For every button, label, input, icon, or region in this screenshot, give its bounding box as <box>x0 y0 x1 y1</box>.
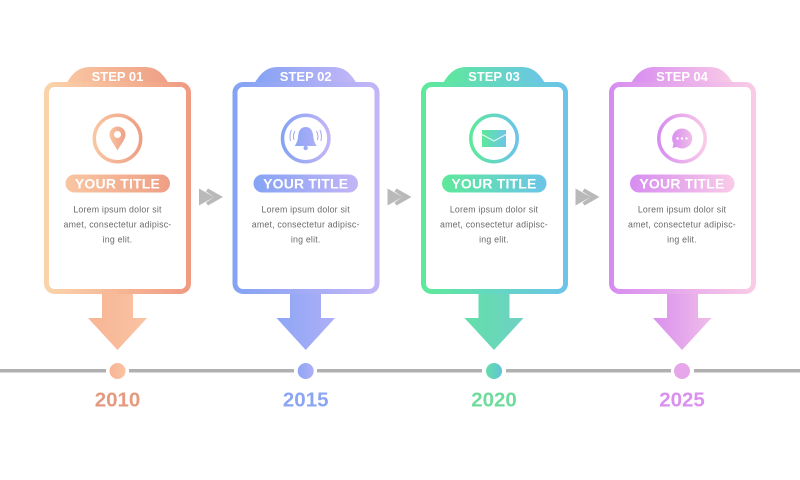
step 03 body text <box>440 204 548 244</box>
step 04 circle icon: chat bubble <box>659 115 705 162</box>
step 02 column <box>235 67 377 412</box>
step 04 timeline dot <box>674 363 690 379</box>
step 03 title pill: YOUR TITLE <box>451 176 537 192</box>
step 03 column <box>424 67 566 412</box>
step 01 arrow <box>88 292 147 350</box>
step 03 body text: ing elit. <box>479 234 509 244</box>
step 02 year: 2015 <box>283 388 329 412</box>
step 01 circle icon: location pin <box>94 115 141 162</box>
step 01 year: 2010 <box>95 388 140 412</box>
step 02 tab <box>254 67 357 84</box>
arrow: step 01 to 02 <box>199 188 223 206</box>
step 04 title pill: YOUR TITLE <box>639 176 725 192</box>
step 02 tab: STEP 02 <box>280 69 332 84</box>
step 01 timeline dot <box>110 363 126 379</box>
step 04 card <box>612 84 754 292</box>
step 04 year: 2025 <box>659 388 705 412</box>
step 01 body text: Lorem ipsum dolor sit <box>73 204 162 214</box>
step 02 title pill: YOUR TITLE <box>263 176 348 192</box>
step 02 timeline dot <box>298 363 314 379</box>
step 02 card <box>235 84 377 292</box>
step 02 circle icon: bell <box>282 115 329 162</box>
step 04 body text: ing elit. <box>667 234 697 244</box>
step 04 body text <box>628 204 736 244</box>
step 01 body text: ing elit. <box>103 234 132 244</box>
step 02 body text <box>252 204 360 244</box>
step 04 body text: Lorem ipsum dolor sit <box>638 204 726 214</box>
arrow: step 02 to 03 <box>388 188 412 206</box>
step 04 column <box>612 67 754 412</box>
step 01 card <box>46 84 188 292</box>
step 02 body text: ing elit. <box>291 234 321 244</box>
step 02 arrow <box>276 292 335 350</box>
step 02 body text: amet, consectetur adipisc- <box>252 220 360 230</box>
step 01 tab <box>66 67 169 84</box>
step 04 tab: STEP 04 <box>656 69 709 84</box>
step 03 timeline dot <box>486 363 502 379</box>
step 03 year: 2020 <box>471 388 517 412</box>
step 03 circle icon: envelope <box>471 115 517 162</box>
step 01 body text <box>64 204 171 244</box>
step 01 title pill: YOUR TITLE <box>75 176 160 192</box>
step 01 column <box>46 67 188 412</box>
step 03 body text: amet, consectetur adipisc- <box>440 220 548 230</box>
step 03 tab: STEP 03 <box>468 69 520 84</box>
step 04 body text: amet, consectetur adipisc- <box>628 220 736 230</box>
step 03 card <box>424 84 566 292</box>
step 04 arrow <box>653 292 712 350</box>
timeline line <box>0 369 800 372</box>
step 02 body text: Lorem ipsum dolor sit <box>262 204 350 214</box>
step 01 tab: STEP 01 <box>92 69 143 84</box>
step 01 body text: amet, consectetur adipisc- <box>64 220 171 230</box>
step 03 arrow <box>464 292 524 350</box>
step 04 tab <box>630 67 734 84</box>
step 03 body text: Lorem ipsum dolor sit <box>450 204 538 214</box>
arrow: step 03 to 04 <box>576 188 600 206</box>
step 03 tab <box>442 67 546 84</box>
